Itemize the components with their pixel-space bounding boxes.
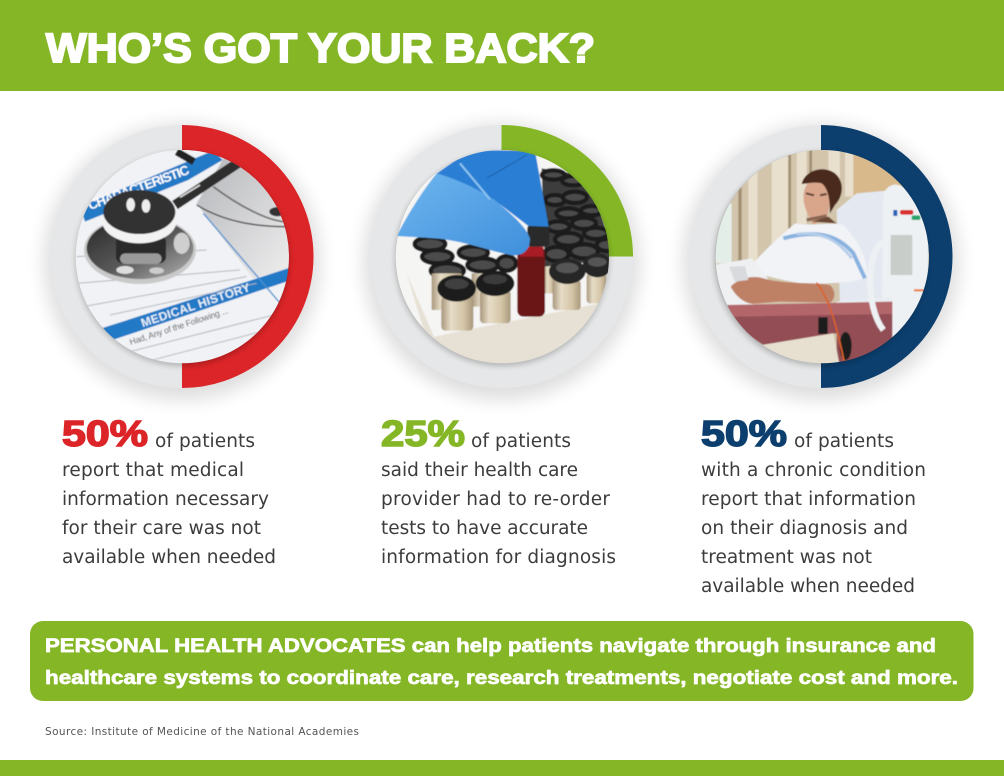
stat text: 50% of patients: of patients: [155, 431, 255, 452]
stat text: 50% of patients: available when needed: [701, 576, 915, 597]
stat text: 50% of patients: information necessary: [62, 489, 269, 510]
photo: patient in hospital bed using a phone: [716, 150, 929, 364]
stat text: 50% of patients: report that medical: [62, 460, 244, 481]
panel: medical records statistic: [44, 124, 320, 568]
callout: personal health advocates: PERSONAL HEALTH ADVOCATES can help patients navigate through insurance and: [45, 635, 936, 657]
donut chart: 50% red: [44, 124, 320, 400]
callout: personal health advocates: healthcare systems to coordinate care, research treatments, negotiate cost and more.: [45, 667, 958, 689]
stat text: 25% of patients: provider had to re-order: [381, 489, 610, 510]
stat text: 50% of patients: report that information: [701, 489, 916, 510]
title: WHO’S GOT YOUR BACK?: [46, 25, 595, 71]
stat text: 50% of patients: 50%: [62, 413, 148, 454]
stat text: 50% of patients: treatment was not: [701, 547, 872, 568]
callout: personal health advocates: [30, 621, 974, 701]
stat text: 50% of patients: 50%: [701, 413, 787, 454]
photo: stethoscope on medical history form: Had, Any of the Following ...: [128, 305, 230, 347]
stat text: 25% of patients: information for diagnosis: [381, 547, 616, 568]
stat text: 50% of patients: available when needed: [62, 547, 276, 568]
panel: chronic condition statistic: [683, 124, 959, 597]
stat text: 50% of patients: [62, 413, 276, 568]
photo: gloved hand picking a blood vial: [396, 150, 609, 364]
stat text: 25% of patients: of patients: [471, 431, 571, 452]
stat text: 25% of patients: said their health care: [381, 460, 578, 481]
photo: stethoscope on medical history form: CHARACTERISTIC: [86, 162, 192, 213]
source note: Source: Institute of Medicine of the National Academies: [45, 726, 359, 738]
donut chart: 50% navy: [683, 124, 959, 400]
stat text: 25% of patients: tests to have accurate: [381, 518, 588, 539]
photo: stethoscope on medical history form: MEDICAL HISTORY: [139, 280, 252, 330]
header banner: [0, 0, 1004, 91]
stat text: 50% of patients: with a chronic condition: [701, 460, 926, 481]
stat text: 50% of patients: on their diagnosis and: [701, 518, 908, 539]
stat text: 50% of patients: for their care was not: [62, 518, 261, 539]
panel: re-ordered tests statistic: [364, 124, 640, 568]
donut chart: 25% green: [364, 124, 640, 400]
stat text: 25% of patients: 25%: [381, 413, 465, 454]
footer bar: [0, 760, 1004, 776]
stat text: 25% of patients: [381, 413, 616, 568]
stat text: 50% of patients: [701, 413, 926, 597]
stat text: 50% of patients: of patients: [794, 431, 894, 452]
photo: stethoscope on medical history form: [76, 150, 289, 364]
